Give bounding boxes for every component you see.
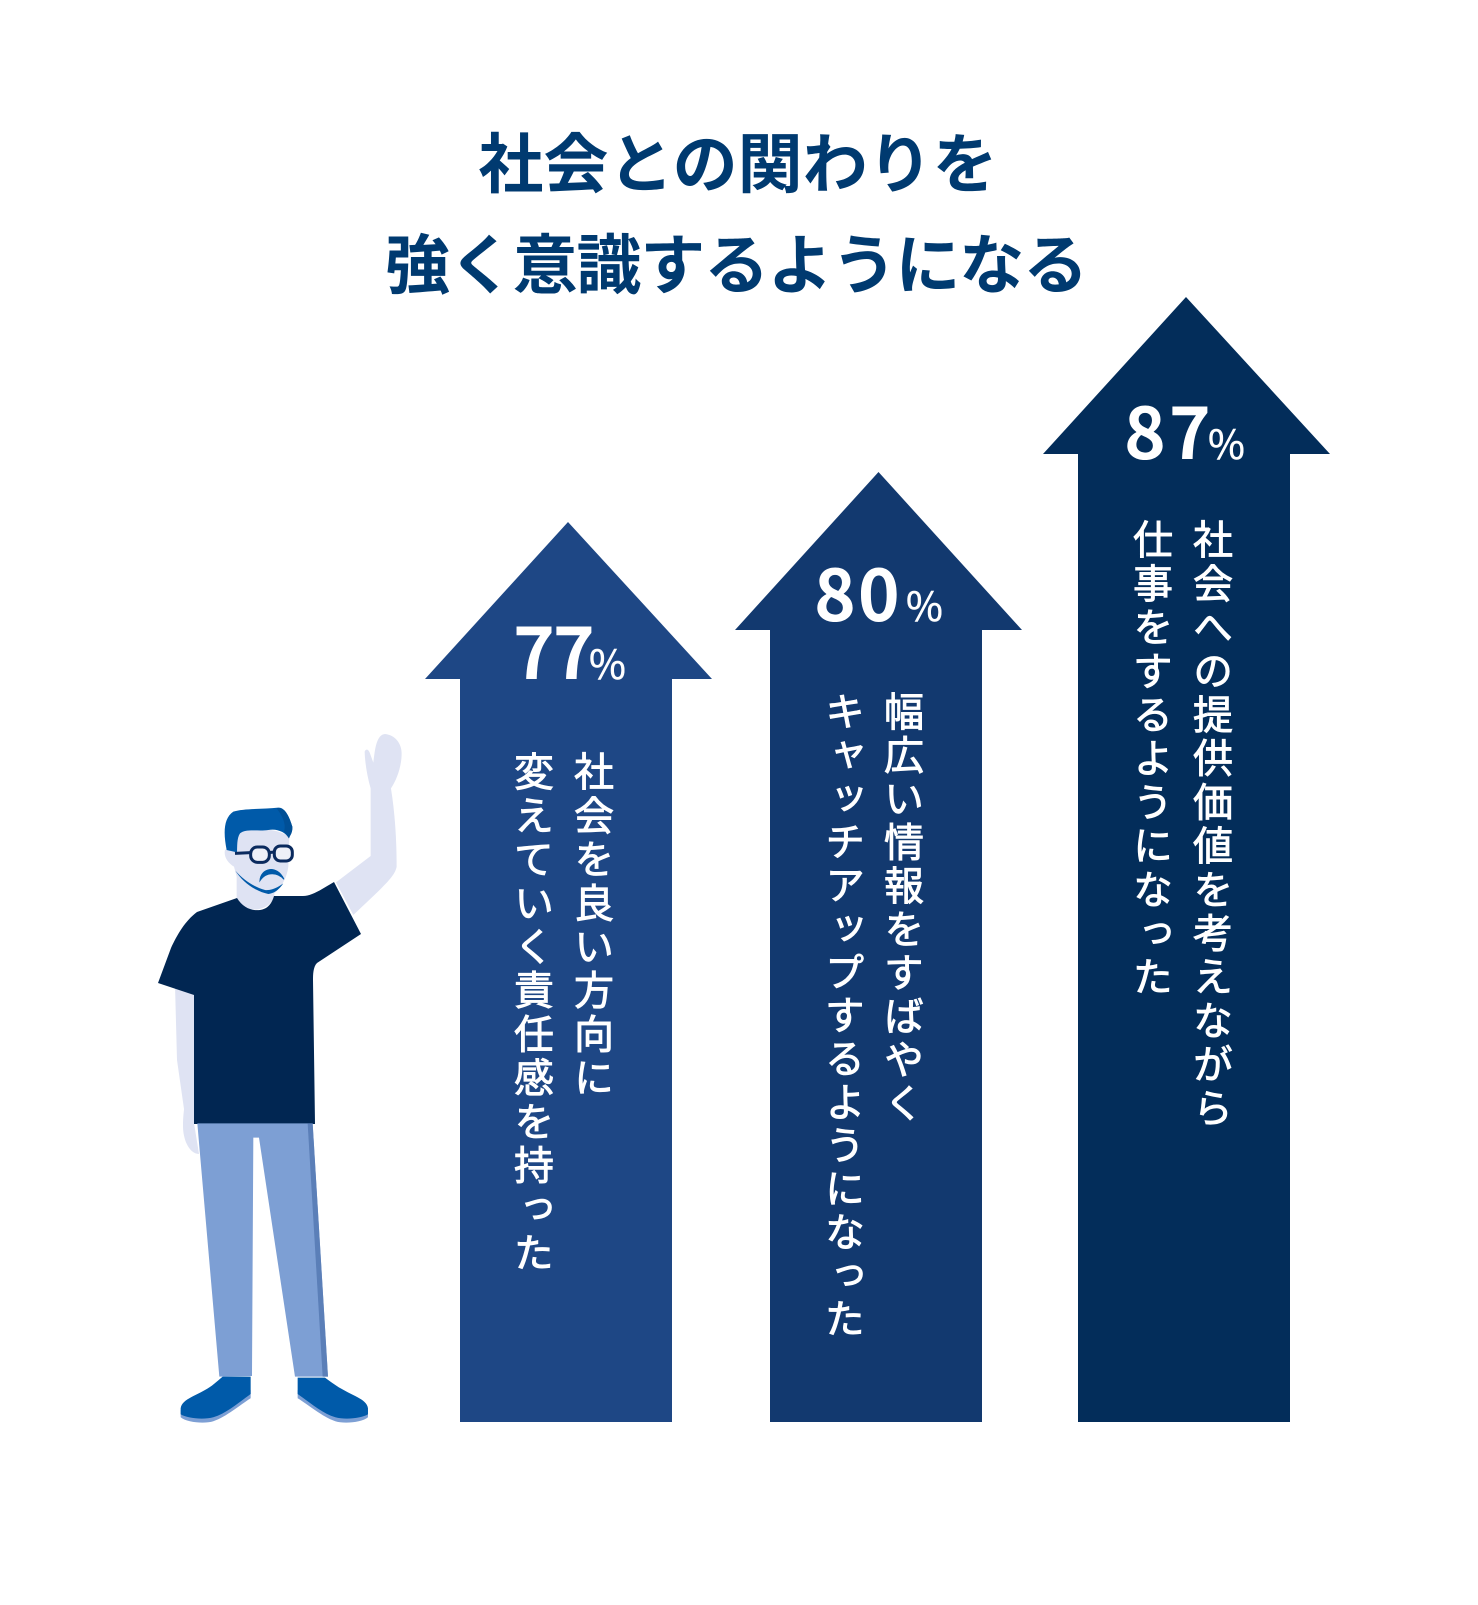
text: 77% description: 社会を良い方向に (565, 751, 623, 1101)
value: 87%: % (1208, 413, 1245, 471)
value: 80%: % (906, 575, 943, 633)
arrow shape: 87% (1043, 297, 1330, 1422)
title (385, 112, 1087, 307)
arrow shape: 80% (735, 472, 1022, 1422)
man: shirt (158, 882, 361, 1124)
title: 社会との関わりを (478, 112, 998, 206)
value: 87%: 87 (1124, 378, 1214, 480)
man: left arm (175, 985, 199, 1154)
text: 77% description (505, 751, 623, 1275)
title: 強く意識するようになる (385, 213, 1087, 307)
value: 80% (814, 540, 943, 642)
illustration: man raising hand (158, 734, 402, 1423)
text: 87% description: 仕事をするようになった (1124, 519, 1182, 1000)
man: left shoe (181, 1377, 251, 1423)
text: 87% description: 社会への提供価値を考えながら (1184, 519, 1242, 1131)
text: 80% description (816, 691, 933, 1341)
value: 77%: % (589, 633, 626, 691)
panel: 80% arrow (735, 472, 1022, 1422)
panel: 77% arrow (425, 522, 712, 1422)
value: 77%: 77 (513, 598, 593, 700)
value: 80%: 80 (814, 540, 902, 642)
man: right shoe (298, 1378, 368, 1423)
text: 77% description: 変えていく責任感を持った (505, 751, 563, 1275)
man: pants (197, 1123, 328, 1377)
man: raised arm (336, 734, 402, 915)
text: 87% description (1124, 519, 1242, 1131)
man: head (225, 808, 292, 910)
panel: 87% arrow (1043, 297, 1330, 1422)
text: 80% description: キャッチアップするようになった (816, 691, 874, 1341)
text: 80% description: 幅広い情報をすばやく (875, 691, 933, 1126)
arrow shape: 77% (425, 522, 712, 1422)
